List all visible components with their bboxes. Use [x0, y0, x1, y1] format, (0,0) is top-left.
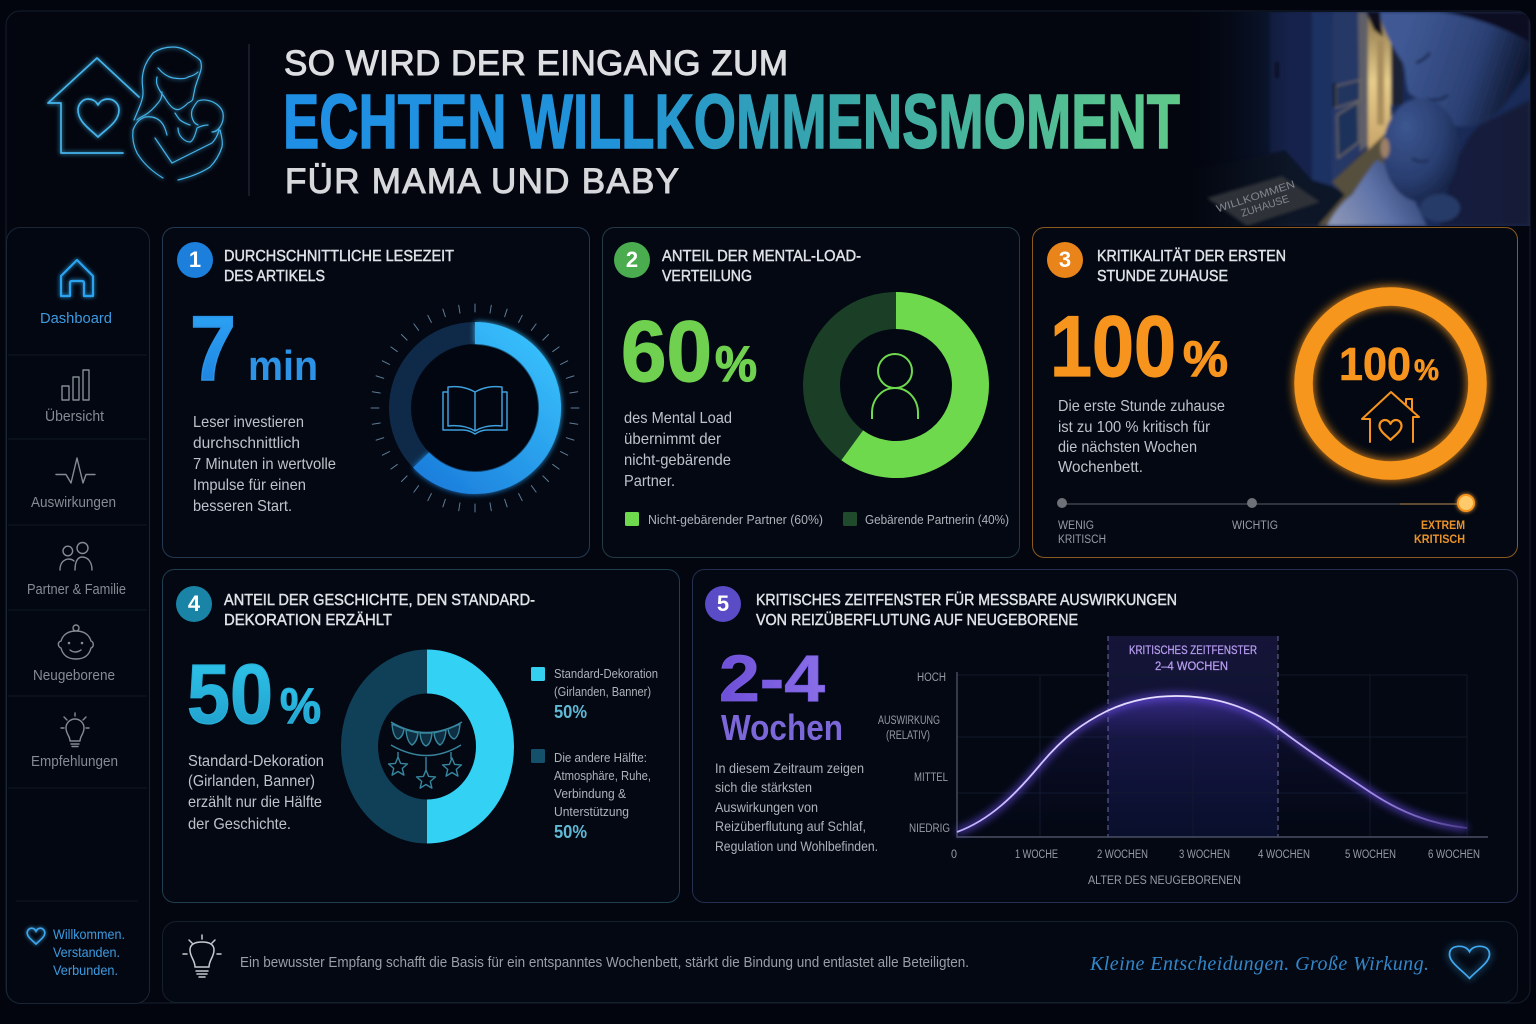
legend 4: Verbindung &	[554, 786, 626, 801]
text: Mental Load	[624, 410, 732, 490]
legend 2: Nicht-gebärender Partner (60%)	[648, 512, 823, 527]
legend 2	[625, 512, 1009, 527]
nav item: Empfehlungen: Empfehlungen	[31, 754, 118, 770]
heading 1: DURCHSCHNITTLICHE LESEZEIT	[224, 248, 454, 265]
scale: criticality: EXTREM	[1421, 520, 1465, 532]
heading 2: ANTEIL DER MENTAL-LOAD-	[662, 248, 861, 265]
legend 4	[531, 666, 658, 842]
heading 5: KRITISCHES ZEITFENSTER FÜR MESSBARE AUSWIRKUNGEN	[756, 591, 1177, 609]
x axis labels: 3 WOCHEN	[1179, 849, 1230, 861]
text: Lesezeit: Impulse für einen	[193, 477, 306, 494]
callout: critical window: 2–4 WOCHEN	[1155, 661, 1228, 673]
sidebar slogan: Verstanden.	[53, 944, 120, 960]
callout: critical window	[1129, 645, 1257, 673]
icon: heart	[1450, 946, 1490, 978]
nav item: Auswirkungen: Auswirkungen	[31, 495, 116, 511]
nav item: Empfehlungen	[31, 713, 118, 770]
text: Mental Load: nicht-gebärende	[624, 452, 731, 469]
tagline: Kleine Entscheidungen. Große Wirkung.	[1089, 953, 1429, 975]
title: SO WIRD DER EINGANG ZUM	[284, 44, 788, 83]
title: ECHTEN WILLKOMMENSMOMENT	[283, 79, 1180, 165]
stat: 60 percent: 60	[621, 304, 712, 400]
text: Lesezeit	[193, 414, 336, 515]
scale: criticality: KRITISCH	[1058, 534, 1106, 546]
icon: garland and stars	[388, 722, 462, 788]
panel: footer takeaway	[162, 922, 1518, 1002]
y axis labels: MITTEL	[914, 772, 949, 784]
x axis labels: 1 WOCHE	[1015, 849, 1058, 861]
y axis labels: (RELATIV)	[886, 730, 930, 742]
text: takeaway: Ein bewusster Empfang schafft die Basis für ein entspanntes Wochenbett, stärkt die Bindung und entlastet alle Beteiligten.	[240, 954, 969, 971]
panel 5: Zeitfenster	[692, 570, 1518, 902]
title	[283, 44, 1180, 201]
badge 5	[705, 586, 741, 622]
x axis labels: ALTER DES NEUGEBORENEN	[1088, 875, 1241, 887]
heading 4: ANTEIL DER GESCHICHTE, DEN STANDARD-	[224, 592, 535, 609]
text: Zeitfenster	[715, 760, 878, 854]
legend 4: Die andere Hälfte:	[554, 750, 647, 765]
icon: person	[872, 354, 918, 419]
x axis labels: 2 WOCHEN	[1097, 849, 1148, 861]
header divider	[248, 44, 250, 196]
heading 5	[756, 591, 1177, 629]
chart: donut 60/40	[822, 310, 970, 460]
text: Zeitfenster: Reizüberflutung auf Schlaf,	[715, 818, 866, 834]
badge 4	[176, 586, 212, 622]
nav item: Partner und Familie: Partner & Familie	[27, 582, 126, 598]
text: Zeitfenster: Auswirkungen von	[715, 799, 818, 815]
stat: 2-4 Wochen: 2-4	[719, 641, 825, 715]
y axis labels: AUSWIRKUNG	[878, 715, 940, 727]
panel 2: Mental Load	[602, 228, 1020, 558]
legend 4: Atmosphäre, Ruhe,	[554, 768, 651, 783]
doormat text: ZUHAUSE	[1239, 193, 1291, 220]
x axis labels: 6 WOCHEN	[1428, 849, 1480, 861]
x axis labels: 4 WOCHEN	[1258, 849, 1310, 861]
header photo: mother and baby at the door	[1190, 12, 1530, 227]
heading 3	[1097, 248, 1286, 285]
stat: 100 percent: %	[1183, 331, 1228, 387]
x axis labels	[951, 849, 1480, 887]
doormat text: WILLKOMMEN	[1215, 178, 1297, 215]
chart: orange ring	[1304, 296, 1478, 470]
nav item: Neugeborene	[33, 625, 115, 684]
stat: 7 min: min	[248, 342, 318, 389]
text: Kritikalität	[1058, 398, 1225, 476]
nav item: Übersicht: Übersicht	[45, 407, 104, 425]
sidebar slogan: Verbunden.	[53, 962, 118, 978]
panel: sidebar navigation	[6, 228, 150, 1004]
chart: ring gauge with ticks	[371, 304, 579, 512]
heading 5: VON REIZÜBERFLUTUNG AUF NEUGEBORENE	[756, 611, 1078, 629]
badge 4: 4	[188, 591, 201, 616]
stat: 2-4 Wochen	[719, 641, 843, 748]
icon: house with heart	[1362, 392, 1419, 442]
text: Lesezeit: besseren Start.	[193, 498, 292, 515]
nav item: Neugeborene: Neugeborene	[33, 668, 115, 684]
legend 2: Gebärende Partnerin (40%)	[865, 512, 1009, 527]
legend 4: Unterstützung	[554, 804, 629, 819]
y axis labels: NIEDRIG	[909, 823, 950, 835]
stat: 50 percent	[187, 647, 321, 741]
chart: orange ring: 100	[1339, 338, 1411, 390]
x axis labels: 0	[951, 849, 957, 861]
legend 4: 50%	[554, 822, 587, 842]
chart: orange ring: %	[1414, 354, 1439, 387]
panel 1: Lesezeit	[162, 228, 590, 558]
stat: 100 percent: 100	[1050, 299, 1176, 395]
stat: 7 min	[190, 298, 318, 400]
heading 4: DEKORATION ERZÄHLT	[224, 612, 393, 629]
text: Dekoration	[188, 753, 324, 833]
scale: criticality: KRITISCH	[1414, 534, 1465, 546]
heading 3: KRITIKALITÄT DER ERSTEN	[1097, 248, 1286, 265]
text: Lesezeit: 7 Minuten in wertvolle	[193, 456, 336, 473]
text: Zeitfenster: sich die stärksten	[715, 779, 812, 795]
chart: impact curve	[878, 636, 1488, 887]
title: FÜR MAMA UND BABY	[285, 162, 679, 201]
legend 4: 50%	[554, 702, 587, 722]
text: Zeitfenster: Regulation und Wohlbefinden.	[715, 838, 878, 854]
text: Kritikalität: Wochenbett.	[1058, 459, 1143, 476]
badge 3: 3	[1059, 247, 1071, 272]
scale: criticality: WENIG	[1058, 520, 1094, 532]
y axis labels	[878, 672, 950, 835]
legend 4: (Girlanden, Banner)	[554, 684, 651, 699]
text: Kritikalität: ist zu 100 % kritisch für	[1058, 419, 1211, 436]
callout: critical window: KRITISCHES ZEITFENSTER	[1129, 645, 1257, 657]
heading 3: STUNDE ZUHAUSE	[1097, 268, 1228, 285]
badge 2	[614, 242, 650, 278]
heading 4	[224, 592, 535, 629]
badge 1: 1	[189, 247, 201, 272]
heading 2	[662, 248, 861, 285]
scale: criticality: WICHTIG	[1232, 520, 1278, 532]
badge 3	[1047, 242, 1083, 278]
nav item: Übersicht	[45, 370, 104, 425]
text: Kritikalität: Die erste Stunde zuhause	[1058, 398, 1225, 415]
text: Dekoration: erzählt nur die Hälfte	[188, 794, 322, 811]
x axis labels: 5 WOCHEN	[1345, 849, 1396, 861]
text: Lesezeit: Leser investieren	[193, 414, 304, 431]
chart: donut 50/50	[341, 650, 514, 844]
y axis labels: HOCH	[917, 672, 946, 684]
logo: house with heart and mother holding baby	[48, 47, 223, 180]
text: Zeitfenster: In diesem Zeitraum zeigen	[715, 760, 864, 776]
sidebar slogan	[27, 926, 125, 978]
panel 3: Kritikalität	[1032, 228, 1518, 558]
text: Dekoration: Standard-Dekoration	[188, 753, 324, 770]
nav item: Partner und Familie	[27, 542, 126, 598]
text: Dekoration: (Girlanden, Banner)	[188, 773, 315, 790]
sidebar slogan: Willkommen.	[53, 926, 125, 942]
heading 1: DES ARTIKELS	[224, 268, 325, 285]
stat: 50 percent: 50	[187, 647, 273, 741]
heading 1	[224, 248, 454, 285]
stat: 7 min: 7	[190, 298, 236, 400]
nav item: Auswirkungen	[31, 458, 116, 511]
stat: 2-4 Wochen: Wochen	[721, 707, 843, 748]
text: Lesezeit: durchschnittlich	[193, 435, 300, 452]
nav item: Dashboard: Dashboard	[40, 310, 112, 327]
heading 2: VERTEILUNG	[662, 268, 752, 285]
text: Mental Load: Partner.	[624, 473, 675, 490]
legend 4: Standard-Dekoration	[554, 666, 658, 681]
panel 4: Dekoration	[162, 570, 680, 902]
nav item: Dashboard	[40, 260, 112, 327]
text: Mental Load: übernimmt der	[624, 431, 722, 448]
text: Mental Load: des Mental Load	[624, 410, 732, 427]
text: Kritikalität: die nächsten Wochen	[1058, 439, 1197, 456]
text: Dekoration: der Geschichte.	[188, 816, 291, 833]
scale: criticality	[1057, 495, 1474, 546]
icon: light bulb	[183, 935, 221, 977]
badge 1	[177, 242, 213, 278]
badge 5: 5	[717, 591, 729, 616]
badge 2: 2	[626, 247, 638, 272]
stat: 50 percent: %	[280, 678, 321, 734]
stat: 60 percent: %	[715, 336, 757, 392]
icon: open book	[443, 387, 507, 434]
